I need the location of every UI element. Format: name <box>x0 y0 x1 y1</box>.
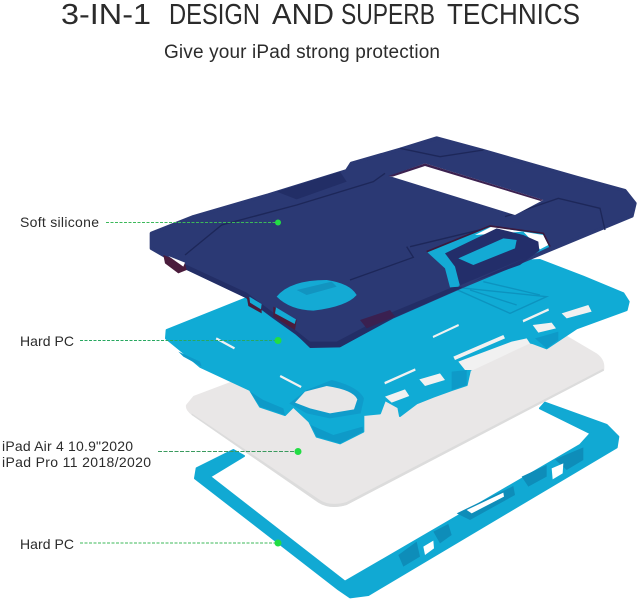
leader line <box>106 222 278 224</box>
label: hard PC frame: Hard PC <box>20 536 74 552</box>
soft silicone shell layer <box>151 138 635 348</box>
leader line <box>80 340 278 342</box>
port cutouts <box>163 255 187 273</box>
leader line <box>158 450 298 452</box>
camera cutout <box>277 280 357 311</box>
leader line <box>80 542 278 544</box>
label: hard PC frame <box>20 536 282 552</box>
back panel seams <box>185 148 605 280</box>
subtitle: Give your iPad strong protection <box>164 42 440 63</box>
kickstand lines <box>450 282 547 313</box>
label: iPad models: iPad Air 4 10.9"2020 <box>2 438 133 454</box>
kickstand window <box>389 163 543 215</box>
ribbed button <box>277 172 347 199</box>
label: iPad models: iPad Pro 11 2018/2020 <box>2 454 151 470</box>
hard PC shell layer <box>166 260 629 443</box>
label: iPad models <box>2 438 302 470</box>
marker dot <box>294 448 302 455</box>
label: hard PC shell <box>20 333 282 349</box>
tablet layer <box>186 287 604 507</box>
camera opening <box>289 380 364 418</box>
label: soft silicone: Soft silicone <box>20 214 99 230</box>
hard PC frame layer <box>195 403 618 597</box>
label: soft silicone <box>20 214 281 230</box>
marker dot <box>275 220 281 226</box>
marker dot <box>274 337 282 344</box>
slots and cutouts <box>216 305 592 403</box>
marker dot <box>274 540 282 546</box>
label: hard PC shell: Hard PC <box>20 333 74 349</box>
lower rim shadow <box>183 263 462 348</box>
kickstand strap <box>427 226 552 287</box>
title <box>61 0 580 31</box>
